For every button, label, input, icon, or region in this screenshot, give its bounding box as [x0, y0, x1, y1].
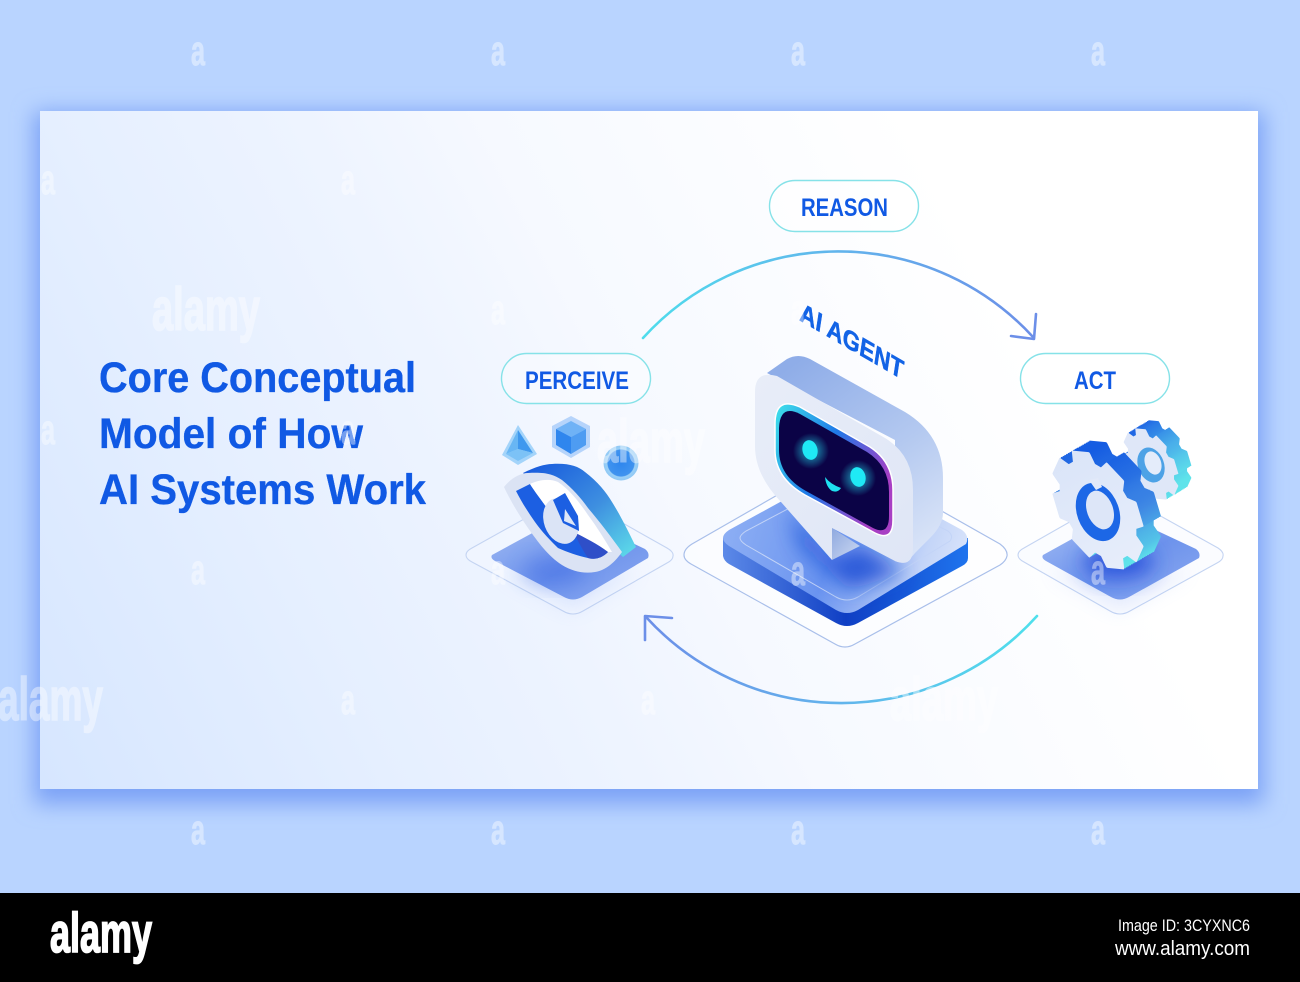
watermarks: a	[1091, 806, 1105, 853]
robot face	[755, 375, 913, 563]
title	[99, 354, 426, 514]
watermarks: a	[341, 676, 355, 723]
main card panel	[40, 111, 1258, 789]
robot screen	[779, 411, 889, 530]
icon: sphere	[604, 446, 638, 480]
watermarks: a	[41, 406, 55, 453]
arrow: reason to act	[643, 251, 1036, 339]
watermarks: alamy	[152, 276, 260, 343]
robot eyes	[793, 433, 876, 496]
watermarks: alamy	[597, 408, 705, 475]
footer image id: Image ID: 3CYXNC6	[1118, 916, 1250, 935]
watermarks: a	[491, 286, 505, 333]
icon: pyramid	[502, 425, 537, 465]
card shadow	[34, 112, 1264, 804]
watermarks: alamy	[890, 666, 998, 733]
watermarks: a	[491, 806, 505, 853]
watermarks: a	[641, 676, 655, 723]
watermarks: a	[191, 27, 205, 74]
title: Core Conceptual	[99, 354, 416, 402]
robot tail side	[832, 528, 860, 560]
footer logo: alamy	[50, 901, 152, 964]
act platform	[1018, 496, 1223, 614]
watermarks: a	[191, 806, 205, 853]
watermarks: a	[491, 27, 505, 74]
watermarks: a	[191, 546, 205, 593]
watermarks: a	[791, 547, 805, 594]
icon: robot chat bubble	[755, 356, 943, 563]
pill: perceive: PERCEIVE	[525, 367, 629, 395]
pill: perceive	[502, 354, 650, 404]
watermarks: alamy	[0, 666, 103, 733]
pill: reason	[770, 180, 918, 232]
watermarks: a	[791, 27, 805, 74]
label: ai agent: AI AGENT	[798, 296, 906, 385]
watermarks: a	[791, 806, 805, 853]
footer url: www.alamy.com	[1114, 938, 1250, 960]
watermarks: a	[491, 546, 505, 593]
robot body side	[767, 356, 943, 562]
watermarks: a	[341, 406, 355, 453]
watermarks	[0, 27, 1105, 853]
pill: reason: REASON	[801, 194, 888, 222]
center platform	[723, 470, 968, 626]
icon: eye	[504, 464, 636, 573]
watermarks: a	[341, 156, 355, 203]
watermarks: a	[791, 286, 805, 333]
title: Model of How	[99, 410, 364, 458]
center platform outline	[684, 459, 1007, 647]
footer bar	[0, 893, 1300, 982]
watermarks: a	[1091, 546, 1105, 593]
robot mouth	[825, 477, 841, 492]
pill: act	[1020, 354, 1170, 404]
watermarks: a	[1091, 27, 1105, 74]
arrow: act to perceive	[645, 616, 1037, 703]
icon: small gear	[1124, 403, 1191, 516]
perceive platform	[466, 496, 673, 614]
watermarks: a	[41, 156, 55, 203]
title: AI Systems Work	[99, 466, 426, 514]
icon: large gear	[1054, 414, 1159, 594]
pill: act: ACT	[1074, 367, 1116, 395]
robot screen ring	[775, 404, 893, 536]
icon: cube	[552, 416, 590, 458]
